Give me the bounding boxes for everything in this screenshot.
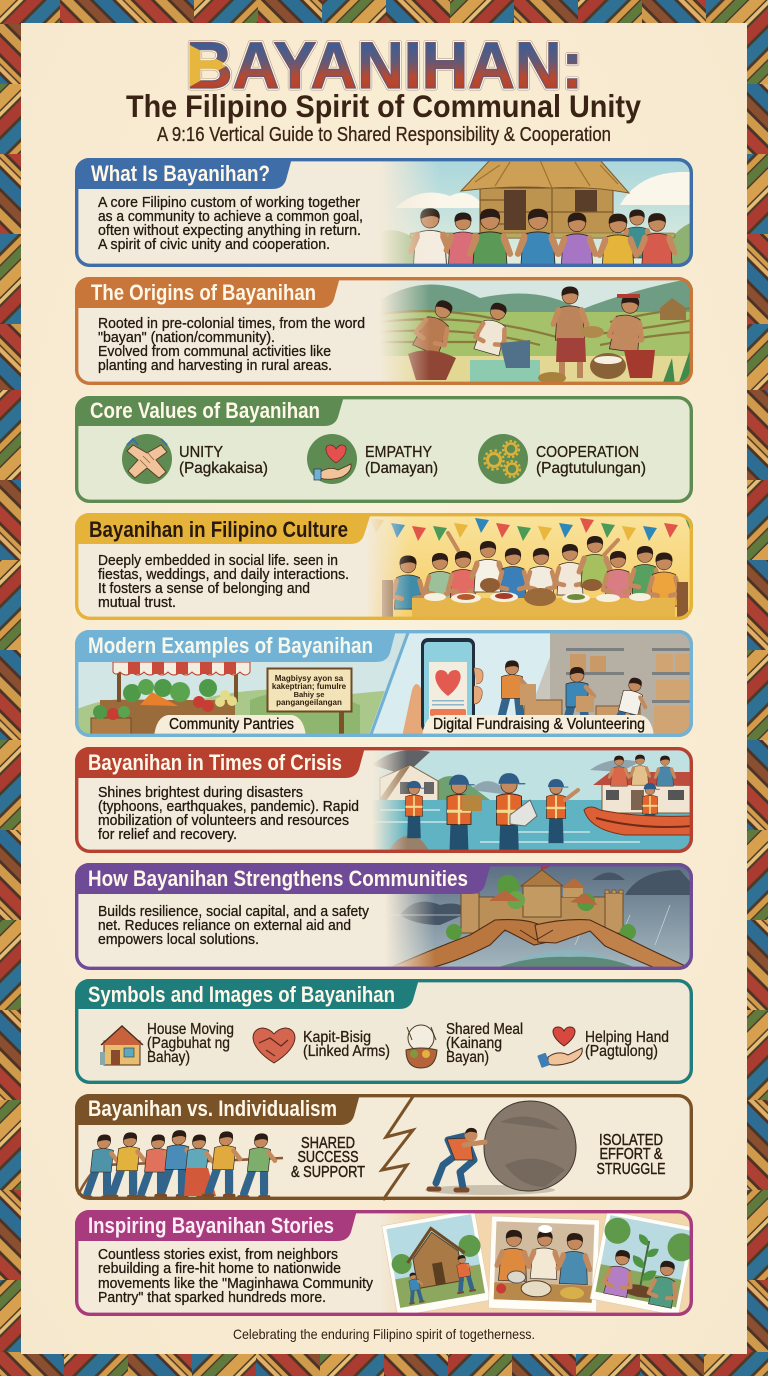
photo: shared cooking <box>488 1216 600 1312</box>
panel: Modern Examples of Bayanihan <box>75 630 693 740</box>
photo: rebuilding a home <box>382 1210 490 1316</box>
panel: The Origins of Bayanihan <box>75 277 693 388</box>
sign: kakeptrian; fumulre <box>272 682 347 691</box>
symbol: kapit-bisig: (Linked Arms) <box>303 1043 390 1060</box>
symbol: house moving: Bahay) <box>147 1049 190 1066</box>
body text: Rooted in pre-colonial times, from the word <box>98 316 365 332</box>
bunting <box>370 518 699 541</box>
heading tab: Modern Examples of Bayanihan <box>88 633 373 658</box>
body text: as a community to achieve a common goal, <box>98 209 363 225</box>
heading tab: Symbols and Images of Bayanihan <box>88 982 395 1007</box>
value: cooperation: (Pagtutulungan) <box>536 460 646 477</box>
illustration: castle on joined hands <box>385 863 693 970</box>
body text <box>98 553 349 611</box>
heading tab <box>75 630 396 662</box>
symbol: house moving <box>100 1021 234 1066</box>
body text: planting and harvesting in rural areas. <box>98 358 332 374</box>
lightning divider <box>382 1095 414 1200</box>
body text <box>98 316 365 374</box>
body text: mutual trust. <box>98 595 176 611</box>
symbol: kapit-bisig <box>253 1028 390 1063</box>
value: cooperation <box>478 434 646 484</box>
symbol: shared meal: Bayan) <box>446 1049 489 1066</box>
label: shared success: SHARED <box>301 1135 355 1152</box>
sign: pangangeilangan <box>276 698 342 707</box>
symbol: helping hand: (Pagtulong) <box>585 1043 658 1060</box>
body text: movements like the "Maginhawa Community <box>98 1276 374 1292</box>
label: shared success: SUCCESS <box>298 1149 358 1166</box>
body text: net. Reduces reliance on external aid and <box>98 918 351 934</box>
icon: heart over hand <box>537 1027 582 1068</box>
symbol: house moving: (Pagbuhat ng <box>147 1035 230 1052</box>
symbol: house moving: House Moving <box>147 1021 234 1038</box>
body text: often without expecting anything in return. <box>98 223 361 239</box>
body text: Evolved from communal activities like <box>98 344 331 360</box>
icon: joined hands <box>122 434 172 484</box>
panel: Bayanihan in Times of Crisis <box>75 747 693 858</box>
tagline: A 9:16 Vertical Guide to Shared Responsibility & Cooperation <box>157 124 611 146</box>
heading tab: The Origins of Bayanihan <box>91 280 316 305</box>
illustration: fiesta table <box>366 513 699 620</box>
panel: Core Values of Bayanihan <box>75 396 693 503</box>
body text: "bayan" (nation/community). <box>98 330 275 346</box>
illustration: community carrying a nipa hut <box>380 158 693 272</box>
label: isolated effort: STRUGGLE <box>596 1161 666 1178</box>
body text <box>98 1247 374 1306</box>
body text: Countless stories exist, from neighbors <box>98 1247 338 1263</box>
body text: A core Filipino custom of working together <box>98 195 360 211</box>
label: digital fundraising: Digital Fundraising & Volunteering <box>433 716 645 733</box>
body text: Builds resilience, social capital, and a safety <box>98 904 370 920</box>
footer: Celebrating the enduring Filipino spirit of togetherness. <box>233 1326 535 1342</box>
body text: empowers local solutions. <box>98 932 259 948</box>
heading tab: Core Values of Bayanihan <box>90 398 320 423</box>
symbol: shared meal: Shared Meal <box>446 1021 523 1038</box>
main title: BAYANIHAN: <box>186 28 583 102</box>
body text: fiestas, weddings, and daily interactions. <box>98 567 349 583</box>
label: isolated effort: ISOLATED <box>599 1132 663 1149</box>
heading tab: How Bayanihan Strengthens Communities <box>88 866 468 891</box>
label: shared success: & SUPPORT <box>291 1164 365 1181</box>
icon: heart in hand <box>307 434 357 484</box>
value: unity <box>122 434 268 484</box>
icon: house <box>100 1026 143 1065</box>
value: empathy <box>307 434 438 484</box>
main title <box>188 40 580 90</box>
sign <box>268 668 352 712</box>
body text: for relief and recovery. <box>98 827 237 843</box>
photo: planting a tree <box>590 1213 690 1313</box>
icon: bowl and plate <box>406 1025 437 1068</box>
value: unity: UNITY <box>179 444 224 461</box>
phone in hand <box>402 638 483 737</box>
value: empathy: (Damayan) <box>365 460 438 477</box>
symbol: shared meal: (Kainang <box>446 1035 502 1052</box>
label: isolated effort <box>596 1132 666 1178</box>
label: shared success <box>291 1135 365 1181</box>
illustration: digital fundraising and warehouse <box>368 630 693 740</box>
heading tab: Inspiring Bayanihan Stories <box>88 1213 334 1238</box>
value: empathy: EMPATHY <box>365 444 433 461</box>
body text <box>98 904 370 948</box>
photo collage <box>380 1210 699 1317</box>
body text <box>98 195 363 253</box>
heading tab: Bayanihan in Times of Crisis <box>88 750 342 775</box>
panel: Symbols and Images of Bayanihan <box>75 979 693 1084</box>
sign: Magbiysy ayon sa <box>275 674 344 683</box>
symbol: helping hand <box>537 1027 669 1068</box>
body text: rebuilding a fire-hit home to nationwide <box>98 1261 341 1277</box>
symbol: kapit-bisig: Kapit-Bisig <box>303 1029 371 1046</box>
panel: Inspiring Bayanihan Stories <box>75 1210 699 1317</box>
body text: A spirit of civic unity and cooperation. <box>98 237 330 253</box>
heading tab: Bayanihan in Filipino Culture <box>89 517 348 542</box>
main title: BAYANIHAN: <box>186 28 583 102</box>
body text: Pantry" that sparked hundreds more. <box>98 1290 326 1306</box>
body text: (typhoons, earthquakes, pandemic). Rapid <box>98 799 359 815</box>
heading tab: Bayanihan vs. Individualism <box>88 1096 337 1121</box>
icon: heart handshake <box>253 1028 295 1063</box>
body text: It fosters a sense of belonging and <box>98 581 310 597</box>
value: cooperation: COOPERATION <box>536 444 639 461</box>
body text: Shines brightest during disasters <box>98 785 303 801</box>
body text: Deeply embedded in social life. seen in <box>98 553 338 569</box>
title block <box>126 40 641 146</box>
main title: BAYANIHAN: <box>186 28 583 102</box>
illustration: lone man pushing boulder <box>425 1101 576 1195</box>
value: unity: (Pagkakaisa) <box>179 460 268 477</box>
panel: What Is Bayanihan <box>75 158 693 272</box>
body text <box>98 785 359 843</box>
heading tab: What Is Bayanihan? <box>91 161 270 186</box>
main title: BAYANIHAN: <box>186 28 583 102</box>
subtitle: The Filipino Spirit of Communal Unity <box>126 88 641 124</box>
panel: How Bayanihan Strengthens Communities <box>75 863 693 970</box>
illustration: flood rescue <box>372 747 693 858</box>
body text: mobilization of volunteers and resources <box>98 813 349 829</box>
illustration: team pulling a rope <box>78 1130 283 1197</box>
symbol: shared meal <box>406 1021 523 1068</box>
icon: gears <box>478 434 528 484</box>
sign: Bahiy ṣe <box>294 690 324 699</box>
symbol: helping hand: Helping Hand <box>585 1029 669 1046</box>
panel: Bayanihan in Filipino Culture <box>75 513 699 620</box>
illustration: community pantry <box>75 662 395 737</box>
label: community pantries: Community Pantries <box>169 716 294 733</box>
illustration: farmers in rice terraces <box>380 277 693 388</box>
label: isolated effort: EFFORT & <box>600 1146 663 1163</box>
panel: Bayanihan vs. Individualism <box>75 1094 693 1200</box>
